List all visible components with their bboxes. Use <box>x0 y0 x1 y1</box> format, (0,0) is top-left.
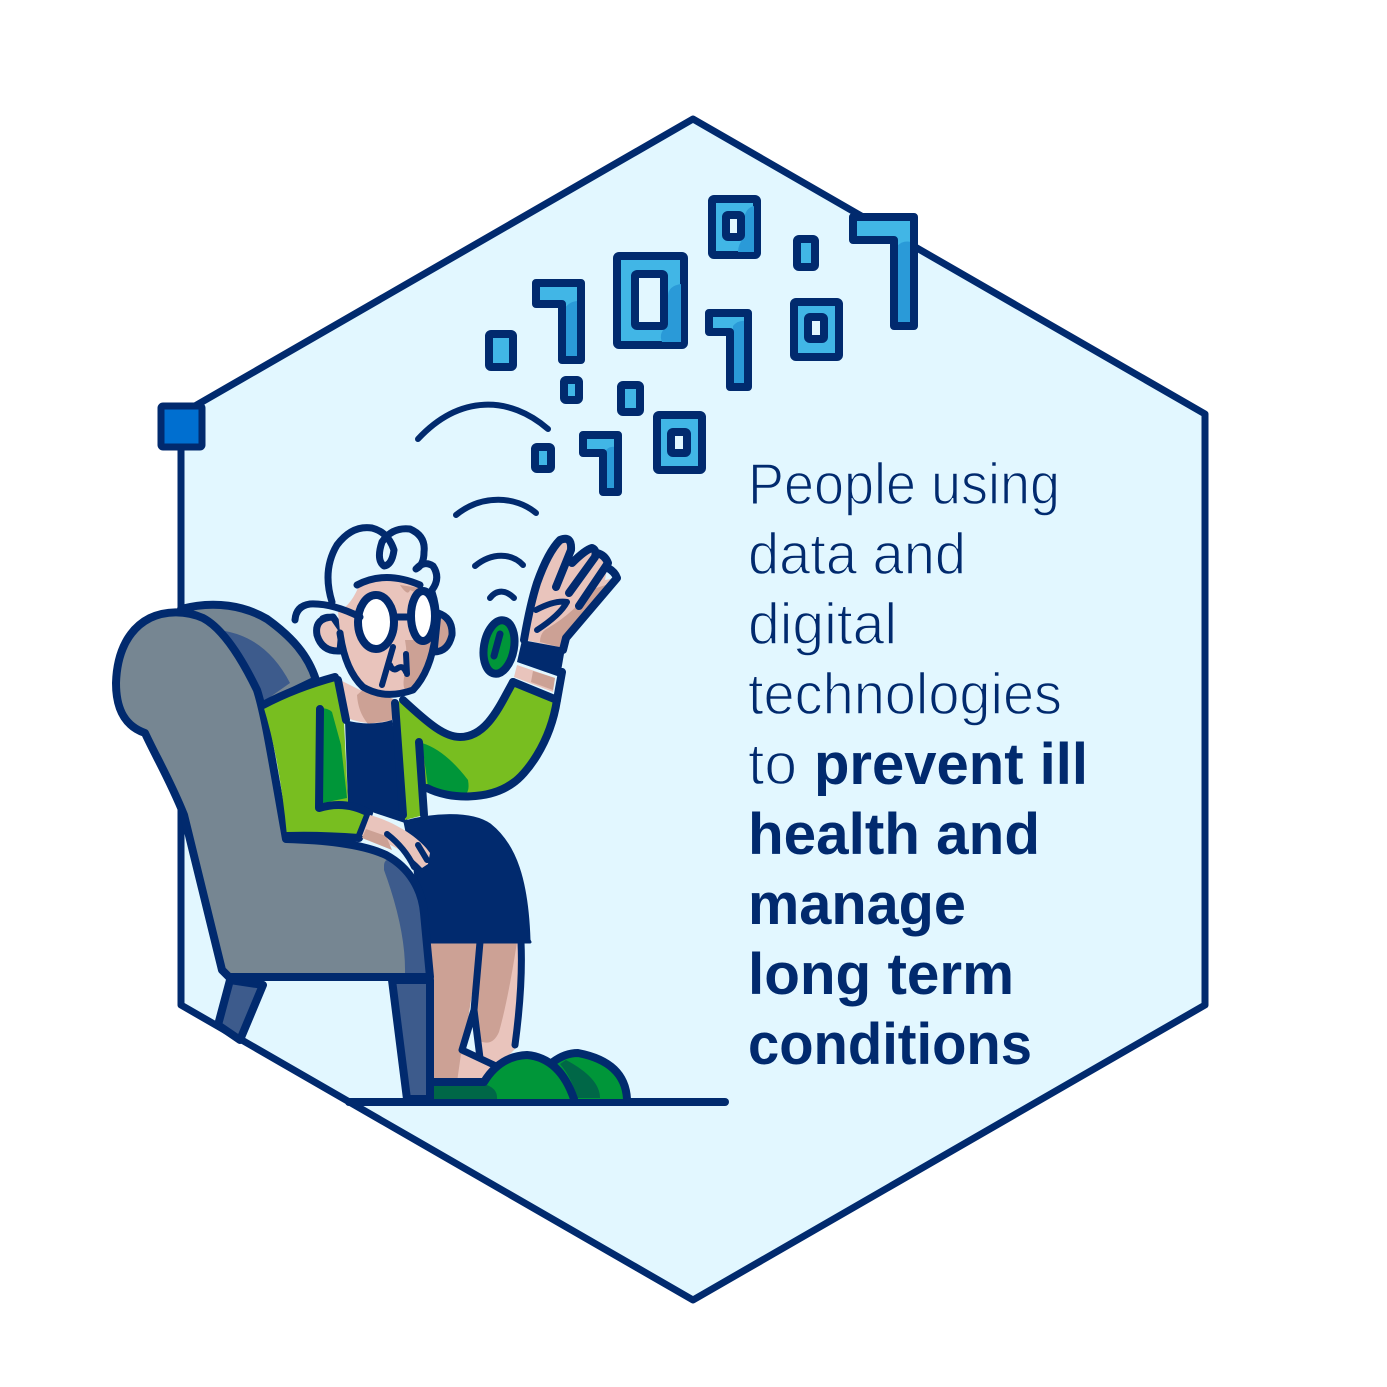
floor line <box>349 1098 725 1106</box>
line 9: conditions <box>748 1012 1032 1077</box>
front slipper sole <box>433 1083 500 1099</box>
chair arm shade <box>384 860 428 974</box>
chair back shade <box>218 630 290 702</box>
line 5 light: to <box>748 732 797 797</box>
watch face <box>480 618 518 676</box>
wrist shade <box>531 671 555 690</box>
neck <box>336 678 396 723</box>
wrist <box>514 665 555 692</box>
near leg <box>430 942 496 1084</box>
armchair <box>116 605 430 1099</box>
cardigan outlines <box>263 677 557 838</box>
hair <box>328 528 437 602</box>
dark top <box>345 720 408 824</box>
leg outlines <box>462 942 521 1066</box>
skirt <box>405 816 530 942</box>
near foot highlight <box>457 1054 496 1084</box>
knee hand lines <box>387 834 427 867</box>
face outline <box>340 592 436 694</box>
digit one: left <box>536 283 581 360</box>
line 4: technologies <box>748 662 1062 727</box>
line 5 bold: prevent ill <box>814 732 1088 797</box>
large zero <box>617 256 684 345</box>
front slipper outline <box>433 1055 574 1099</box>
nose and mouth <box>382 647 407 685</box>
line 8: long term <box>748 942 1014 1007</box>
line 2: data and <box>748 522 966 587</box>
chair back <box>181 605 316 706</box>
digit one: large right <box>853 217 914 326</box>
watch strap <box>517 640 565 677</box>
chair outline <box>116 612 430 977</box>
data particles: binary digits <box>489 199 914 492</box>
lower zero <box>657 415 702 470</box>
face shade <box>400 585 435 691</box>
knee hand <box>362 815 430 868</box>
ear right <box>434 613 452 652</box>
right zero <box>794 302 839 357</box>
chair rear leg <box>218 980 263 1040</box>
top zero <box>712 199 757 255</box>
ear inner line <box>322 616 331 618</box>
person's upper body <box>263 528 617 868</box>
line 7: manage <box>748 872 966 937</box>
back slipper <box>553 1053 627 1099</box>
hand shade <box>540 583 612 648</box>
front slipper <box>484 1055 574 1099</box>
line 6: health and <box>748 802 1040 867</box>
hand outline <box>524 539 617 650</box>
bridge and arm <box>295 604 410 620</box>
sleeve shade <box>422 743 469 794</box>
cardigan right and arm <box>395 682 557 820</box>
cardigan left <box>263 677 368 838</box>
watch highlight <box>494 634 500 656</box>
digit one: lower <box>583 435 618 492</box>
small digit blocks <box>489 239 815 469</box>
far leg shade <box>474 942 517 1043</box>
line 3: digital <box>748 592 897 657</box>
sleeve cuff <box>513 672 562 700</box>
digit one: middle <box>709 313 748 387</box>
cardigan left inner <box>320 708 347 803</box>
far leg <box>474 942 522 1066</box>
glasses <box>295 591 435 649</box>
waving hand <box>525 539 617 648</box>
palm creases <box>536 602 567 630</box>
left lens <box>358 595 394 649</box>
neck shade <box>357 688 396 724</box>
right lens <box>411 591 435 641</box>
person's legs and slippers <box>430 942 627 1099</box>
line 1: People using <box>748 452 1060 517</box>
smartwatch <box>480 618 518 676</box>
hexagon panel <box>181 119 1205 1300</box>
face <box>338 578 437 694</box>
main statement text <box>748 452 1088 1077</box>
ear left <box>317 617 342 651</box>
knee hand shade <box>362 829 392 850</box>
signal waves <box>418 405 548 598</box>
chair front leg <box>392 980 430 1099</box>
chair body <box>116 612 430 977</box>
icon: blue corner square <box>161 406 202 447</box>
back slipper shade <box>560 1060 600 1098</box>
back slipper outline <box>553 1053 627 1099</box>
